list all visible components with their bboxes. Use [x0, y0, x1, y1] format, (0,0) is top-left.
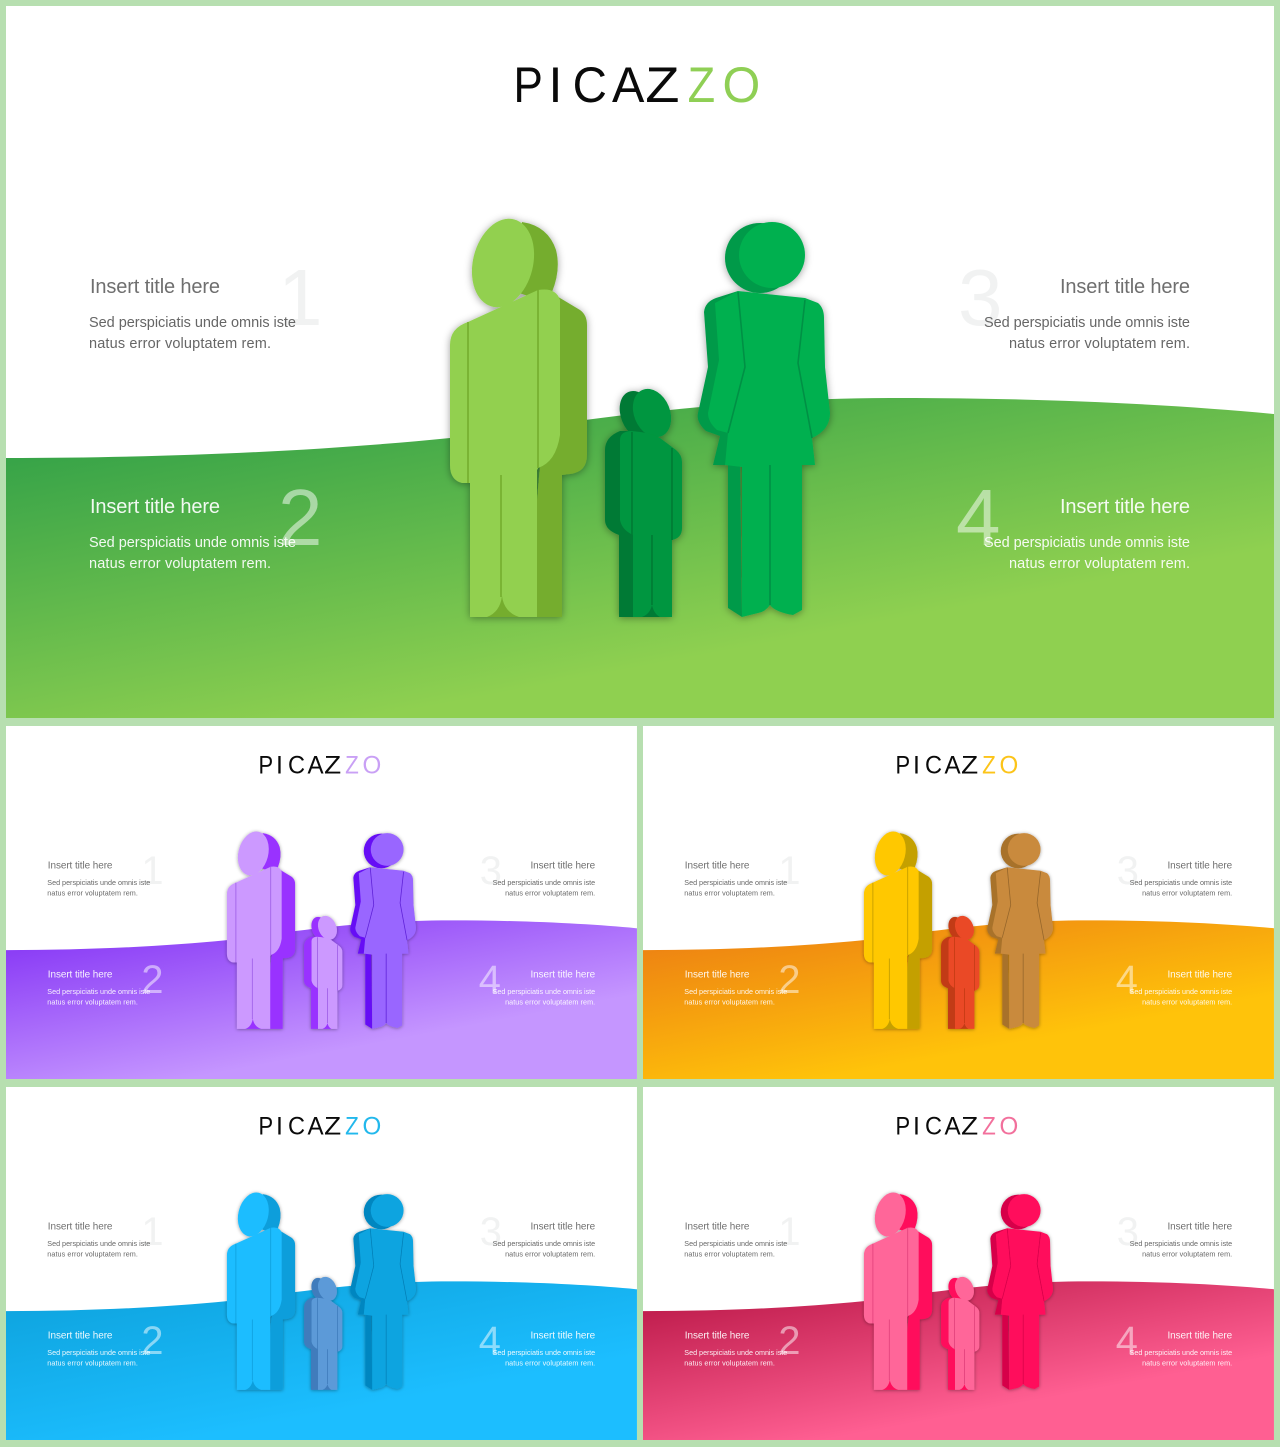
logo: A — [945, 752, 961, 780]
number 3: 3 — [480, 849, 502, 893]
figure: child — [941, 913, 979, 1029]
panel: orange slide — [643, 726, 1274, 1079]
block 2 body: Sed perspiciatis unde omnis iste — [47, 987, 150, 996]
number 3: 3 — [958, 253, 1002, 342]
logo — [259, 751, 381, 780]
figure: woman — [698, 222, 830, 617]
hill: orange wave — [643, 920, 1274, 1079]
block 3 body: Sed perspiciatis unde omnis iste — [1130, 1239, 1232, 1248]
number 3: 3 — [1117, 1210, 1139, 1254]
block 2 title: Insert title here — [48, 969, 113, 980]
number 4: 4 — [1116, 958, 1138, 1002]
logo: O — [1000, 1113, 1018, 1141]
figure: child — [304, 913, 342, 1029]
block 1 title: Insert title here — [685, 1221, 750, 1232]
logo: P — [259, 751, 273, 779]
block 2 title: Insert title here — [685, 1330, 750, 1341]
block 2 title: Insert title here — [90, 496, 220, 518]
block 2 title: Insert title here — [685, 969, 750, 980]
logo — [514, 56, 760, 114]
block 4 body: natus error voluptatem rem. — [505, 998, 595, 1007]
logo: C — [288, 752, 305, 780]
block 4 body: Sed perspiciatis unde omnis iste — [1130, 987, 1232, 996]
block 4 body: Sed perspiciatis unde omnis iste — [984, 535, 1190, 551]
number 2: 2 — [778, 1319, 800, 1363]
block 1 title: Insert title here — [48, 860, 113, 871]
block 1 body: Sed perspiciatis unde omnis iste — [684, 878, 787, 887]
hill: pink wave — [643, 1281, 1274, 1440]
logo: I — [913, 1114, 920, 1141]
block 4 body: natus error voluptatem rem. — [1142, 998, 1232, 1007]
logo: O — [722, 57, 760, 113]
block 2 title: Insert title here — [48, 1330, 113, 1341]
logo: Z — [961, 751, 978, 779]
panel: blue slide — [6, 1087, 637, 1440]
number 2: 2 — [778, 958, 800, 1002]
figure: child — [304, 1274, 342, 1390]
block 2 body: natus error voluptatem rem. — [684, 998, 775, 1007]
number 1: 1 — [141, 849, 163, 893]
block 1 title: Insert title here — [48, 1221, 113, 1232]
figure: woman — [987, 833, 1053, 1029]
block 3 body: natus error voluptatem rem. — [1142, 1250, 1232, 1259]
block 4 title: Insert title here — [1060, 496, 1190, 518]
number 4: 4 — [956, 473, 1000, 562]
block 4 title: Insert title here — [1167, 969, 1233, 980]
block 3 body: Sed perspiciatis unde omnis iste — [984, 315, 1190, 331]
number 2: 2 — [141, 1319, 163, 1363]
logo: I — [548, 57, 562, 113]
block 3 body: Sed perspiciatis unde omnis iste — [493, 878, 595, 887]
logo: P — [896, 751, 910, 779]
block 1 body: natus error voluptatem rem. — [89, 336, 271, 352]
block 1 body: natus error voluptatem rem. — [47, 1250, 138, 1259]
block 3 body: natus error voluptatem rem. — [505, 1250, 595, 1259]
logo: Z — [324, 1112, 341, 1140]
block 1 body: Sed perspiciatis unde omnis iste — [89, 315, 296, 331]
block 1 body: Sed perspiciatis unde omnis iste — [47, 1239, 150, 1248]
figure: man — [227, 1189, 295, 1390]
block 4 title: Insert title here — [530, 969, 596, 980]
hill: green wave — [6, 398, 1274, 718]
figure: woman — [350, 833, 416, 1029]
block 1 body: natus error voluptatem rem. — [47, 889, 138, 898]
block 2 body: Sed perspiciatis unde omnis iste — [89, 535, 296, 551]
number 1: 1 — [141, 1210, 163, 1254]
figure: child — [605, 383, 682, 617]
logo: C — [925, 1113, 942, 1141]
logo: Z — [345, 753, 359, 780]
logo: I — [913, 753, 920, 780]
figure: child — [941, 1274, 979, 1390]
number 1: 1 — [778, 849, 800, 893]
block 3 body: natus error voluptatem rem. — [505, 889, 595, 898]
block 3 title: Insert title here — [1060, 276, 1190, 298]
block 2 body: Sed perspiciatis unde omnis iste — [684, 987, 787, 996]
block 3 body: natus error voluptatem rem. — [1009, 336, 1190, 352]
block 1 body: Sed perspiciatis unde omnis iste — [684, 1239, 787, 1248]
block 3 body: Sed perspiciatis unde omnis iste — [1130, 878, 1232, 887]
logo: Z — [982, 1114, 996, 1141]
logo: C — [573, 58, 607, 113]
block 3 title: Insert title here — [530, 1221, 596, 1232]
figure: man — [227, 828, 295, 1029]
logo: A — [308, 1113, 324, 1141]
panel: purple slide — [6, 726, 637, 1079]
logo: O — [1000, 752, 1018, 780]
block 4 title: Insert title here — [1167, 1330, 1233, 1341]
block 1 title: Insert title here — [90, 276, 220, 298]
logo — [259, 1112, 381, 1141]
logo: Z — [324, 751, 341, 779]
block 1 title: Insert title here — [685, 860, 750, 871]
logo: I — [276, 753, 283, 780]
logo: I — [276, 1114, 283, 1141]
number 2: 2 — [141, 958, 163, 1002]
number 1: 1 — [778, 1210, 800, 1254]
block 4 title: Insert title here — [530, 1330, 596, 1341]
figure: woman — [350, 1194, 416, 1390]
number 3: 3 — [1117, 849, 1139, 893]
block 1 body: natus error voluptatem rem. — [684, 889, 775, 898]
logo: A — [612, 57, 644, 113]
block 3 title: Insert title here — [1167, 1221, 1233, 1232]
block 1 body: Sed perspiciatis unde omnis iste — [47, 878, 150, 887]
logo: Z — [961, 1112, 978, 1140]
block 3 body: Sed perspiciatis unde omnis iste — [493, 1239, 595, 1248]
number 4: 4 — [1116, 1319, 1138, 1363]
number 2: 2 — [278, 473, 322, 562]
logo: O — [363, 752, 381, 780]
figure: woman — [987, 1194, 1053, 1390]
block 4 body: Sed perspiciatis unde omnis iste — [493, 1348, 595, 1357]
number 4: 4 — [479, 1319, 501, 1363]
figure: man — [864, 1189, 932, 1390]
block 4 body: natus error voluptatem rem. — [1009, 556, 1190, 572]
number 1: 1 — [278, 253, 322, 342]
block 2 body: Sed perspiciatis unde omnis iste — [684, 1348, 787, 1357]
logo: P — [896, 1112, 910, 1140]
block 2 body: natus error voluptatem rem. — [47, 1359, 138, 1368]
block 2 body: natus error voluptatem rem. — [89, 556, 271, 572]
number 4: 4 — [479, 958, 501, 1002]
block 1 body: natus error voluptatem rem. — [684, 1250, 775, 1259]
block 2 body: natus error voluptatem rem. — [684, 1359, 775, 1368]
block 4 body: Sed perspiciatis unde omnis iste — [493, 987, 595, 996]
block 3 body: natus error voluptatem rem. — [1142, 889, 1232, 898]
logo: A — [308, 752, 324, 780]
panel: green main slide — [6, 6, 1274, 718]
logo — [896, 1112, 1018, 1141]
logo: P — [514, 56, 543, 113]
logo: A — [945, 1113, 961, 1141]
number 3: 3 — [480, 1210, 502, 1254]
logo — [896, 751, 1018, 780]
logo: Z — [345, 1114, 359, 1141]
figure: man — [864, 828, 932, 1029]
logo: Z — [688, 58, 715, 114]
block 3 title: Insert title here — [530, 860, 596, 871]
hill: purple wave — [6, 920, 637, 1079]
logo: Z — [982, 753, 996, 780]
logo: Z — [645, 58, 680, 113]
logo: P — [259, 1112, 273, 1140]
block 4 body: Sed perspiciatis unde omnis iste — [1130, 1348, 1232, 1357]
logo: O — [363, 1113, 381, 1141]
block 3 title: Insert title here — [1167, 860, 1233, 871]
block 2 body: Sed perspiciatis unde omnis iste — [47, 1348, 150, 1357]
block 4 body: natus error voluptatem rem. — [1142, 1359, 1232, 1368]
logo: C — [925, 752, 942, 780]
panel: pink slide — [643, 1087, 1274, 1440]
hill: blue wave — [6, 1281, 637, 1440]
figure: man — [450, 212, 587, 617]
logo: C — [288, 1113, 305, 1141]
block 2 body: natus error voluptatem rem. — [47, 998, 138, 1007]
block 4 body: natus error voluptatem rem. — [505, 1359, 595, 1368]
